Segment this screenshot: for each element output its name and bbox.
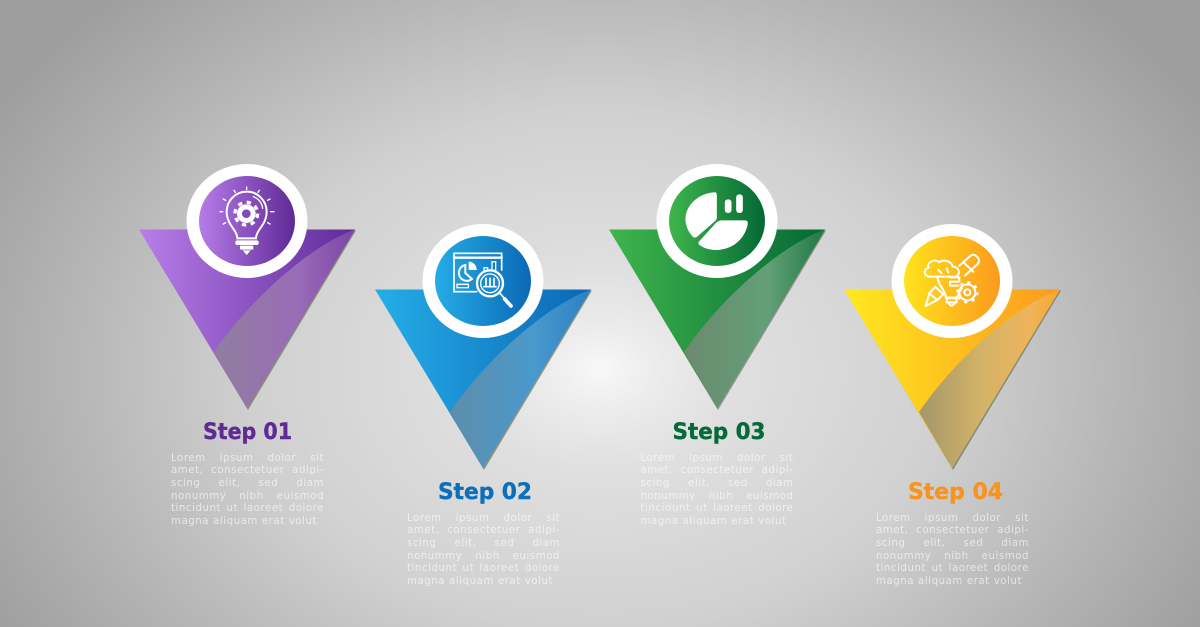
text block: step 03: scing elit, sed diam: [640, 478, 794, 489]
text block: step 03: [640, 453, 794, 527]
text block: step 04: scing elit, sed diam: [876, 538, 1029, 549]
text block: step 04: tincidunt ut laoreet dolore: [876, 563, 1029, 574]
text block: step 03: nonummy nibh euismod: [640, 491, 794, 502]
panel: step 04: [844, 224, 1061, 587]
text block: step 02: tincidunt ut laoreet dolore: [407, 563, 560, 574]
text block: step 04: Lorem ipsum dolor sit: [876, 513, 1029, 524]
text block: step 04: nonummy nibh euismod: [876, 551, 1029, 562]
heading: Step 04: Step 04: [908, 480, 1003, 505]
text block: step 04: amet, consectetuer adipi-: [876, 525, 1029, 536]
heading: Step 03: Step 03: [672, 420, 765, 445]
text block: step 01: tincidunt ut laoreet dolore: [171, 503, 324, 514]
text block: step 02: amet, consectetuer adipi-: [407, 525, 560, 536]
icon: light bulb with gear: [220, 187, 274, 255]
text block: step 02: nonummy nibh euismod: [407, 551, 560, 562]
text block: step 02: magna aliquam erat volut: [407, 576, 553, 587]
text block: step 02: [407, 513, 560, 587]
text block: step 04: [876, 513, 1029, 587]
heading: Step 01: Step 01: [203, 420, 292, 445]
text block: step 01: Lorem ipsum dolor sit: [171, 453, 324, 464]
triangle: [844, 290, 1061, 470]
text block: step 03: amet, consectetuer adipi-: [640, 465, 794, 476]
icon: creative bulb, pencil and gear: [925, 255, 979, 306]
triangle: [375, 290, 592, 470]
badge circle: [186, 164, 308, 278]
triangle: [608, 230, 826, 410]
panel: step 01: [139, 164, 356, 527]
text block: step 01: scing elit, sed diam: [171, 478, 324, 489]
badge circle: [656, 164, 777, 278]
text block: step 01: magna aliquam erat volut: [171, 516, 317, 527]
text block: step 04: magna aliquam erat volut: [876, 576, 1022, 587]
heading: Step 02: Step 02: [438, 480, 532, 505]
text block: step 01: [171, 453, 324, 527]
text block: step 02: Lorem ipsum dolor sit: [407, 513, 560, 524]
panel: step 02: [375, 224, 592, 587]
icon: dashboard with magnifier: [454, 253, 511, 306]
triangle: [139, 230, 356, 410]
badge circle: [892, 224, 1012, 338]
text block: step 03: tincidunt ut laoreet dolore: [640, 503, 794, 514]
text block: step 01: amet, consectetuer adipi-: [171, 465, 324, 476]
badge circle: [422, 224, 544, 338]
text block: step 01: nonummy nibh euismod: [171, 491, 324, 502]
icon: pie chart with bars: [685, 192, 747, 250]
text block: step 03: Lorem ipsum dolor sit: [640, 453, 794, 464]
text block: step 03: magna aliquam erat volut: [640, 516, 786, 527]
text block: step 02: scing elit, sed diam: [407, 538, 560, 549]
panel: step 03: [609, 164, 826, 527]
